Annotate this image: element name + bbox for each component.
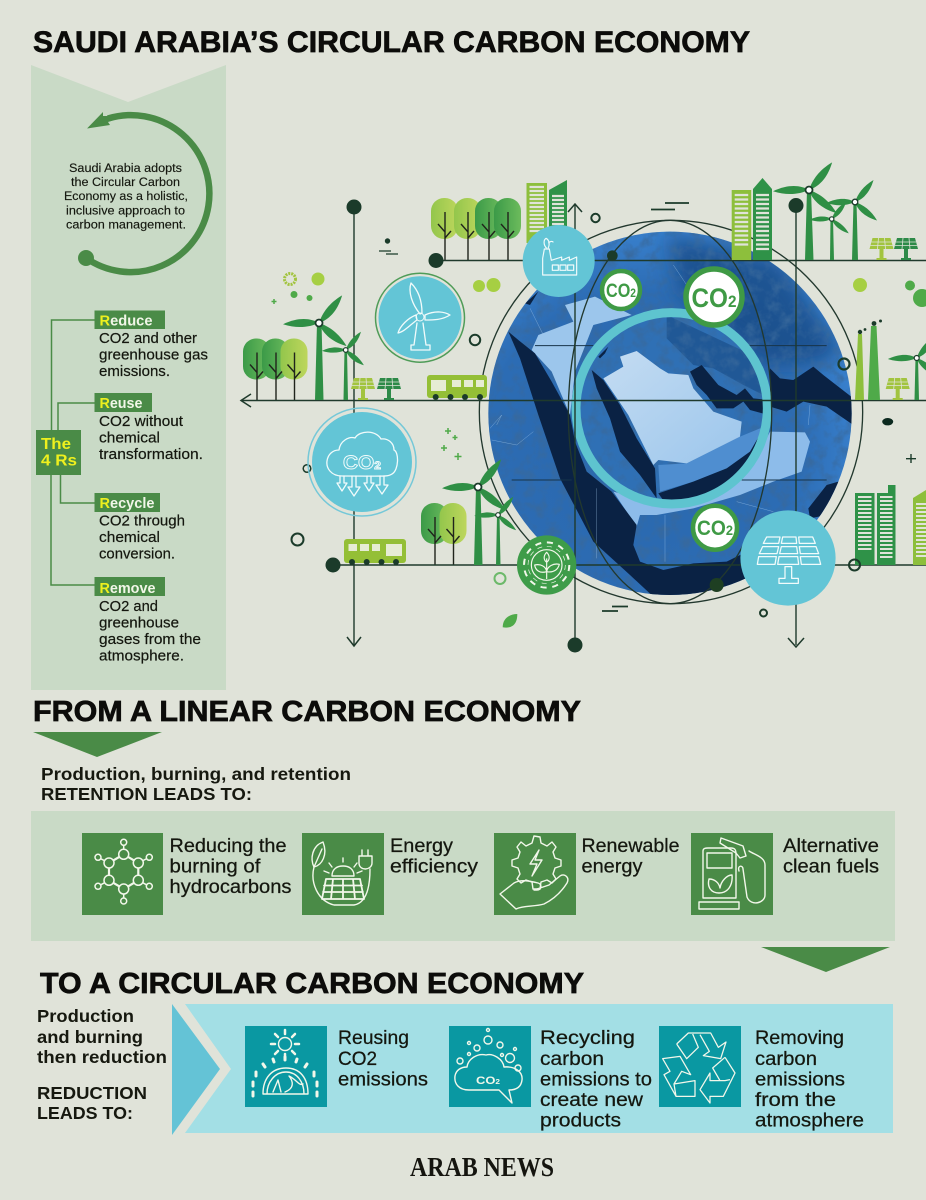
item: reducing hydrocarbons: Reducing the <box>170 836 286 857</box>
globe disc <box>488 232 852 595</box>
item: reducing hydrocarbons: hydrocarbons <box>170 877 292 898</box>
item: recycling carbon: products <box>540 1110 621 1132</box>
buses <box>344 375 487 565</box>
item: energy efficiency: efficiency <box>390 856 479 878</box>
item: recycling carbon: Recycling <box>540 1028 635 1049</box>
text: circular intro: then reduction <box>37 1047 167 1067</box>
badge: CO2 large <box>686 269 742 325</box>
item: reduce: greenhouse gas <box>99 348 208 364</box>
logo: Arab News: ARAB NEWS <box>410 1152 554 1182</box>
item: removing carbon: carbon <box>755 1049 817 1070</box>
text: circular intro: Production <box>37 1006 134 1026</box>
text: circular intro: REDUCTION <box>37 1083 147 1103</box>
text: intro: carbon management. <box>66 218 186 232</box>
text: linear intro: Production, burning, and retention <box>41 764 351 784</box>
item: reusing CO2: emissions <box>338 1070 428 1090</box>
item: reuse: chemical <box>99 430 160 446</box>
item: recycling carbon: carbon <box>540 1049 604 1070</box>
panel background <box>31 65 226 690</box>
item: reducing hydrocarbons <box>82 833 292 915</box>
inner magnified disc <box>576 313 767 504</box>
label: the 4 Rs: The <box>41 436 71 453</box>
trees left <box>243 338 308 400</box>
item: reduce: emissions. <box>99 364 170 380</box>
item: recycling carbon: emissions to <box>540 1070 652 1090</box>
text: linear intro <box>41 764 351 804</box>
item: energy efficiency: Energy <box>390 836 454 857</box>
icon: gear and plant circle <box>517 535 576 595</box>
text: intro: Saudi Arabia adopts <box>69 161 182 175</box>
label: the 4 Rs: 4 Rs <box>41 452 77 470</box>
item: reuse: CO2 without <box>99 414 183 430</box>
item: remove <box>94 577 201 664</box>
badge: CO2 lower: CO2 <box>697 517 733 540</box>
item: recycling carbon: create new <box>540 1090 643 1111</box>
item: reusing CO2: CO2 <box>338 1049 377 1070</box>
arrow: linear down <box>33 732 162 757</box>
badge: CO2 small: CO2 <box>606 281 636 302</box>
item: clean fuels: clean fuels <box>783 856 879 878</box>
text: intro: Economy as a holistic, <box>64 189 188 203</box>
panel: circular carbon intro and the 4 Rs <box>31 65 226 690</box>
item: recycle: chemical <box>99 530 160 546</box>
chimneys <box>855 320 882 400</box>
teal ring <box>576 313 767 504</box>
icon: CO2 cloud circle <box>308 408 416 516</box>
item: recycling carbon <box>449 1026 652 1132</box>
trees lower <box>421 503 466 565</box>
badge: CO2 small <box>602 271 640 309</box>
item: recycle: conversion. <box>99 546 175 562</box>
item: reduce: CO2 and other <box>99 331 197 347</box>
item: renewable energy: Renewable <box>582 836 680 857</box>
item: recycle <box>94 493 185 562</box>
heading: to a circular carbon economy: TO A CIRCULAR CARBON ECONOMY <box>40 968 584 1000</box>
item: removing carbon: Removing <box>755 1028 844 1049</box>
item: reducing hydrocarbons: burning of <box>170 856 261 878</box>
text: circular intro <box>37 1006 167 1123</box>
item: reduce: Reduce <box>100 314 152 330</box>
text: intro: the Circular Carbon <box>71 175 180 189</box>
icon: CO2 cloud circle: CO 2 <box>343 453 381 474</box>
orbit rings <box>479 220 863 604</box>
trees upper <box>431 198 521 260</box>
item: reusing CO2 <box>245 1026 428 1107</box>
item: reuse: transformation. <box>99 447 203 463</box>
wind turbines <box>283 160 926 565</box>
item: removing carbon: atmosphere <box>755 1110 864 1132</box>
arrow: teal chevron <box>172 1004 220 1135</box>
arrow: circular down <box>761 947 890 972</box>
item: recycling carbon: CO 2 <box>476 1075 500 1087</box>
small dots and rings <box>272 203 926 628</box>
item: remove: Remove <box>100 581 156 597</box>
panel: reduction leads to <box>185 1004 893 1133</box>
icon: circular arrow <box>78 112 209 272</box>
item: renewable energy: energy <box>582 856 643 878</box>
item: reuse <box>94 393 203 463</box>
panel: retention leads to <box>31 811 895 941</box>
icon: wind turbine circle <box>376 273 464 362</box>
illustration: green city and globe <box>241 160 926 652</box>
item: reduce <box>94 310 208 380</box>
item: recycle: CO2 through <box>99 514 185 530</box>
item: reusing CO2: Reusing <box>338 1028 409 1049</box>
item: remove: atmosphere. <box>99 648 184 664</box>
heading: from a linear carbon economy: FROM A LINEAR CARBON ECONOMY <box>33 696 581 728</box>
label: the 4 Rs <box>36 430 81 475</box>
text: intro <box>64 161 188 232</box>
item: energy efficiency <box>302 833 479 915</box>
item: recycle: Recycle <box>100 496 154 512</box>
item: removing carbon: from the <box>755 1090 836 1111</box>
item: clean fuels <box>691 833 879 915</box>
connectors <box>51 320 95 585</box>
text: circular intro: LEADS TO: <box>37 1103 133 1123</box>
text: intro: inclusive approach to <box>66 204 185 218</box>
icon: solar panel circle <box>740 510 836 606</box>
text: linear intro: RETENTION LEADS TO: <box>41 784 252 804</box>
item: clean fuels: Alternative <box>783 836 879 857</box>
item: reuse: Reuse <box>100 396 142 412</box>
text: circular intro: and burning <box>37 1027 143 1047</box>
item: remove: greenhouse <box>99 616 179 632</box>
badge: CO2 lower <box>693 506 737 550</box>
item: renewable energy <box>494 833 680 915</box>
globe map of Saudi Arabia <box>479 220 863 604</box>
title: SAUDI ARABIA’S CIRCULAR CARBON ECONOMY <box>33 26 750 59</box>
item: remove: CO2 and <box>99 599 158 615</box>
item: removing carbon <box>659 1026 864 1132</box>
icon: factory circle <box>523 225 595 297</box>
axes and arrows <box>241 198 926 652</box>
solar panels <box>351 238 918 400</box>
badge: CO2 large: CO2 <box>692 283 736 313</box>
item: removing carbon: emissions <box>755 1070 845 1090</box>
item: remove: gases from the <box>99 632 201 648</box>
buildings <box>526 178 926 565</box>
